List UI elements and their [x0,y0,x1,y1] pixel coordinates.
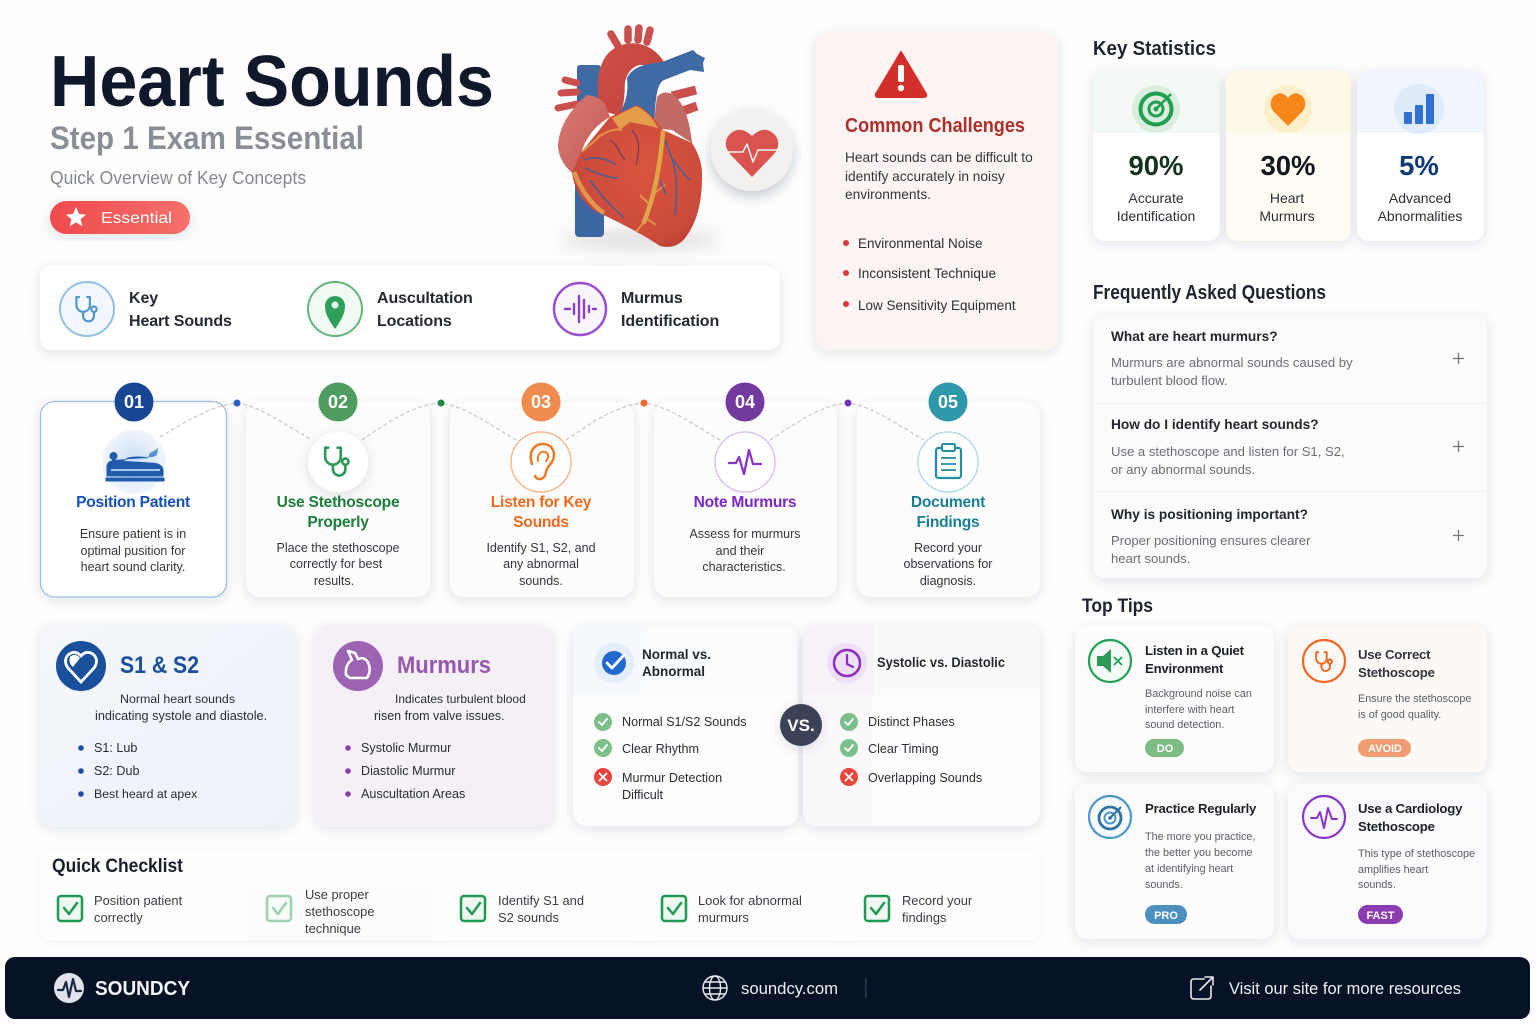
step number 05 [928,382,968,422]
call to action: Visit our site for more resources [1229,979,1461,998]
text: murmus identification: Murmus [621,290,683,307]
list: Diastolic Murmur [361,764,455,778]
step title: Listen for Key [491,494,591,511]
list of challenges [843,236,1016,313]
tip: practice regularly: the better you become [1145,847,1252,859]
panel: topic nav [40,266,780,350]
panel: stat 90%: Identification [1117,208,1195,224]
icon: waveform [554,283,606,335]
faq item 3: Why is positioning important? [1111,507,1308,522]
badge: vs: VS. [787,716,815,735]
tip: correct stethoscope: AVOID [1368,743,1402,755]
step text: Ensure patient is in [80,527,186,541]
step text: correctly for best [290,557,383,571]
text block: environments. [845,187,931,202]
tip: cardiology stethoscope [1288,784,1487,939]
list of challenges: Environmental Noise [858,236,983,251]
tip: correct stethoscope [1288,626,1487,772]
list: S2: Dub [94,764,140,778]
panel: title hero [40,30,785,255]
subtitle: Step 1 Exam Essential [50,120,364,156]
tip: quiet environment: DO [1157,743,1174,755]
list: Difficult [622,788,664,802]
text: auscultation locations: Locations [377,313,452,330]
step title: Properly [307,514,369,531]
step text: Place the stethoscope [276,541,400,555]
panel: stat 90%: Accurate [1128,190,1184,206]
tip: correct stethoscope: is of good quality. [1358,709,1441,721]
connector: step path [160,400,924,440]
list: Murmur Detection [622,771,722,785]
check item 2: technique [305,921,361,936]
panel: step 5 [857,402,1040,597]
icon: pulse [715,432,775,492]
heading: faq: Frequently Asked Questions [1093,282,1326,304]
icon: ear [511,432,571,492]
coronary vessels [584,140,690,218]
tagline: Quick Overview of Key Concepts [50,168,306,188]
list: Normal S1/S2 Sounds [622,715,747,729]
faq item 3: heart sounds. [1111,551,1190,566]
step text: sounds. [519,574,563,588]
faq item 2 [1111,417,1464,477]
step text: and their [716,544,764,558]
heading: Systolic vs. Diastolic [877,655,1005,670]
check item 5: findings [902,910,946,925]
badge: vs [780,704,822,746]
step text: characteristics. [702,560,786,574]
check item 1 [58,893,183,925]
tip: cardiology stethoscope: FAST [1366,910,1395,922]
faq item 1 [1111,329,1464,388]
step number 05: 05 [938,392,958,412]
faq item 2: or any abnormal sounds. [1111,462,1255,477]
step title: Document [911,494,985,511]
tip: practice regularly [1075,784,1274,939]
list [78,741,198,801]
icon: warning triangle [876,52,926,97]
tip: practice regularly: at identifying heart [1145,863,1233,875]
aortic branches [611,28,650,46]
step number 03: 03 [531,392,551,412]
check item 2 [267,887,375,936]
list: S1: Lub [94,741,137,755]
tip: practice regularly: Practice Regularly [1145,801,1257,816]
text block: indicating systole and diastole. [95,709,267,723]
panel: quick checklist [40,850,1040,940]
coronary fat [612,106,658,130]
list [594,713,747,802]
text block: Normal heart sounds [120,692,235,706]
step text: Identify S1, S2, and [486,541,596,555]
check item 3: Identify S1 and [498,893,584,908]
panel: normal vs abnormal [573,625,798,826]
panel: stat 30% [1226,70,1351,241]
pulmonary stubs [558,80,577,108]
panel: stat 30%: Heart [1270,190,1304,206]
list: Systolic Murmur [361,741,451,755]
check item 2: Use proper [305,887,369,902]
tip: quiet environment: sound detection. [1145,719,1224,731]
check item 2: stethoscope [305,904,375,919]
list [840,713,982,786]
heading: Common Challenges [845,115,1025,137]
icon: stethoscope [60,282,114,336]
text block: risen from valve issues. [374,709,505,723]
panel: step 1 [40,402,226,597]
heading: S1 & S2 [120,652,199,679]
step number 03 [522,382,560,422]
check item 4: murmurs [698,910,749,925]
icon: clipboard [918,432,978,492]
icon: patient on bed [102,430,166,494]
text: auscultation locations: Auscultation [377,290,473,307]
check item 1: Position patient [94,893,182,908]
icon: stethoscope [308,432,368,492]
heading: Abnormal [642,664,705,679]
list: Clear Rhythm [622,742,699,756]
text: key heart sounds: Heart Sounds [129,313,232,330]
step title: Use Stethoscope [277,494,399,511]
icon: heart pulse badge [711,109,793,191]
step text: diagnosis. [920,574,976,588]
check item 4: Look for abnormal [698,893,802,908]
panel: stat 5%: Advanced [1389,190,1451,206]
panel: stat 5%: Abnormalities [1378,208,1462,224]
icon: clock [827,643,867,683]
step text: observations for [904,557,992,571]
website: soundcy.com [741,979,838,998]
right atrium [558,95,610,173]
tip: practice regularly: PRO [1154,910,1178,922]
step text: results. [314,574,354,588]
step text: Assess for murmurs [689,527,801,541]
tip: cardiology stethoscope: This type of stethoscope [1358,848,1475,860]
step number 01: 01 [124,392,144,412]
vena cava [577,65,601,125]
panel: faq [1093,315,1487,578]
step title: Note Murmurs [694,494,797,511]
list: Auscultation Areas [361,787,465,801]
list [345,741,465,801]
tip: cardiology stethoscope: Stethoscope [1358,819,1435,834]
logo [54,973,191,1003]
panel: systolic vs diastolic [803,625,1040,826]
tip: cardiology stethoscope: amplifies heart [1358,864,1428,876]
footer [5,957,1530,1019]
text: murmus identification: Identification [621,313,719,330]
list: Overlapping Sounds [868,771,982,785]
panel: murmurs [315,625,553,826]
faq item 2: How do I identify heart sounds? [1111,417,1319,432]
panel: stat 30%: Murmurs [1259,208,1315,224]
tip: quiet environment: interfere with heart [1145,704,1234,716]
step number 04 [726,382,764,422]
panel: stat 5%: 5% [1399,150,1439,181]
panel: step 3 [450,402,634,597]
list: Best heard at apex [94,787,198,801]
icon: heart anatomy [333,641,383,691]
check item 3: S2 sounds [498,910,559,925]
pulmonary trunk [618,50,705,122]
heading: Normal vs. [642,647,711,662]
panel: stat 30%: 30% [1260,150,1316,181]
step title: Sounds [513,514,569,531]
step number 04: 04 [735,392,755,412]
panel: s1 and s2 [40,625,295,826]
tip: quiet environment [1075,626,1274,772]
title: Heart Sounds [50,42,494,122]
list of challenges: Low Sensitivity Equipment [858,298,1016,313]
faq item 1: What are heart murmurs? [1111,329,1278,344]
panel: stat 90%: 90% [1128,150,1184,181]
faq item 1: turbulent blood flow. [1111,373,1227,388]
aorta [598,43,664,116]
tip: correct stethoscope: Use Correct [1358,647,1430,662]
tip: practice regularly: The more you practice, [1145,831,1255,843]
heading: Quick Checklist [52,856,184,877]
tip: cardiology stethoscope: sounds. [1358,879,1396,891]
heading: Murmurs [397,652,491,679]
tip: practice regularly: sounds. [1145,879,1183,891]
tip: quiet environment: Background noise can [1145,688,1252,700]
check item 5 [865,893,973,925]
heading: key statistics: Key Statistics [1093,38,1216,60]
badge: essential: Essential [101,210,172,227]
list: Clear Timing [868,742,939,756]
illustration: anatomical heart [558,28,720,250]
text block: Heart sounds can be difficult to [845,150,1033,165]
panel: step 2 [246,402,430,597]
step text: optimal pusition for [81,544,185,558]
tip: correct stethoscope: Stethoscope [1358,665,1435,680]
text block: Indicates turbulent blood [395,692,526,706]
icon: heart [56,641,106,691]
panel: step 4 [654,402,837,597]
step number 02: 02 [328,392,348,412]
logo: SOUNDCY [95,978,191,1000]
check item 3 [461,893,584,925]
panel: stat 90% [1093,70,1220,241]
website [703,976,838,1000]
list of challenges: Inconsistent Technique [858,266,996,281]
check item 1: correctly [94,910,143,925]
tip: quiet environment: Environment [1145,661,1224,676]
faq item 3 [1111,507,1464,566]
step text: Record your [914,541,982,555]
faq item 1: Murmurs are abnormal sounds caused by [1111,355,1353,370]
step text: any abnormal [503,557,579,571]
faq item 2: Use a stethoscope and listen for S1, S2, [1111,444,1345,459]
faq item 3: Proper positioning ensures clearer [1111,533,1310,548]
text: key heart sounds: Key [129,290,158,307]
tip: correct stethoscope: Ensure the stethoscope [1358,693,1471,705]
step text: heart sound clarity. [81,560,185,574]
step title: Findings [917,514,980,531]
icon: location pin [308,282,362,336]
check item 4 [662,893,802,925]
panel: stat 5% [1357,70,1484,241]
heading: top tips: Top Tips [1082,596,1153,617]
ventricle [572,105,702,247]
step number 02 [318,382,358,422]
list: Distinct Phases [868,715,955,729]
check item 5: Record your [902,893,972,908]
step number 01 [114,382,154,422]
tip: cardiology stethoscope: Use a Cardiology [1358,801,1462,816]
tip: quiet environment: Listen in a Quiet [1145,643,1244,658]
step title: Position Patient [76,494,190,511]
text block: identify accurately in noisy [845,169,1005,184]
panel: common challenges [815,32,1058,350]
icon: blue check [594,643,634,683]
badge: essential [50,201,190,234]
